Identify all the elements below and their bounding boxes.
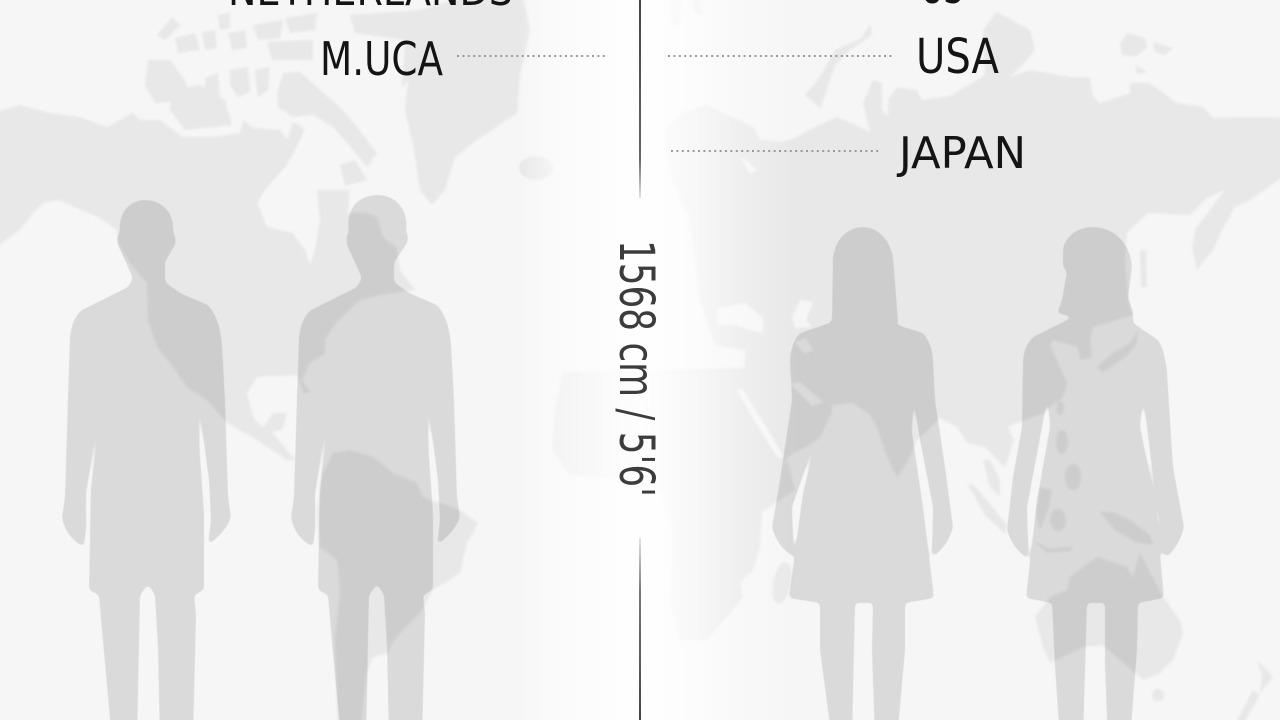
map: New Zealand south [1232,690,1260,720]
centre glow [520,0,800,720]
map: Eurasia and Africa [552,12,1280,640]
height label: 1568 cm / 5'6' [608,240,664,497]
map: North America [0,105,415,460]
map: New Zealand [1257,660,1273,693]
map: Madagascar [769,561,795,605]
map: Novaya Zemlya [805,24,872,108]
label: USA: USA [916,29,999,85]
map: Arctic islands of Eurasia [668,0,1173,74]
label: garbled left country: M.UCA [320,32,443,86]
map: Canadian Arctic islands [145,13,377,186]
map: South America [317,450,478,720]
silhouette: woman one [772,227,953,720]
map: inland seas [717,157,823,464]
dotted leader: Japan [671,150,880,152]
map: Tasmania [1152,689,1164,701]
map: Iceland [519,156,553,180]
dotted leader: left country [457,55,608,57]
silhouette: woman two [1007,227,1184,720]
map: Greenland [350,0,530,205]
map: Southeast Asia islands [967,401,1153,553]
silhouette: man two [291,195,460,720]
map: Japan [1097,330,1138,372]
map: Sakhalin [1140,250,1147,287]
divider line top [639,0,641,198]
label: Japan: JAPAN [896,128,1026,179]
map: Hudson Bay [257,117,363,265]
divider line bottom [639,538,641,720]
dotted leader: USA [668,55,894,57]
map: Australia [1035,553,1183,680]
silhouette: man one [62,200,231,720]
